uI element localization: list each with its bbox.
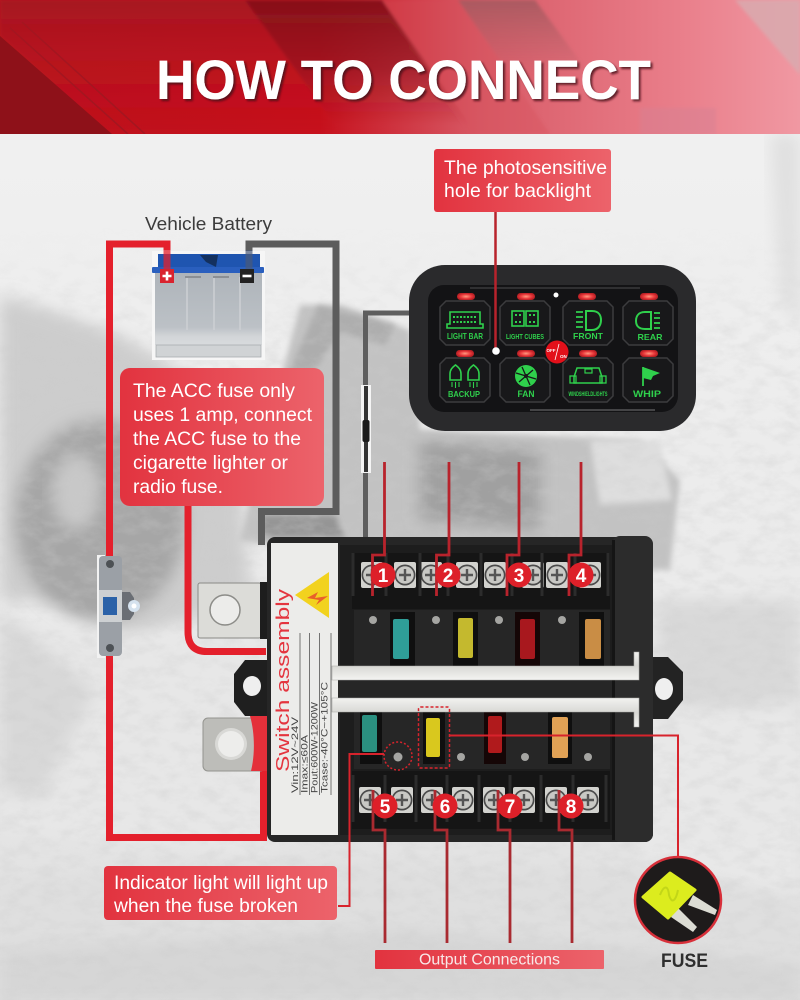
specification lines [290, 682, 330, 793]
button: windshield lights: WINDSHIELDLIGHTS [568, 392, 608, 398]
switch panel [409, 265, 696, 431]
fuse icon [635, 857, 721, 943]
button: front [563, 301, 613, 345]
ACC fuse wire [188, 500, 266, 652]
specification lines: Vin:12V~24V [290, 716, 301, 793]
negative terminal [240, 269, 254, 283]
badge 8 [558, 794, 584, 818]
button: whip [623, 358, 673, 402]
input wires top [372, 462, 581, 596]
badge 1 [370, 562, 396, 588]
callout: ACC fuse: the ACC fuse to the [133, 429, 301, 450]
badge 4: 4 [576, 566, 587, 587]
label heading: Switch assembly [273, 589, 293, 772]
upper fuse row [354, 610, 610, 666]
button: backup: BACKUP [448, 389, 480, 399]
button: light cubes [500, 301, 550, 345]
terminal lug upper [198, 582, 268, 639]
badge 5 [372, 794, 398, 818]
button: front: FRONT [573, 331, 604, 341]
callout: ACC fuse [120, 368, 324, 506]
specification lines: Imax:≤60A [300, 734, 310, 793]
button: fan [500, 358, 550, 402]
left mount ear [234, 660, 270, 716]
lower terminal strip [352, 771, 610, 829]
callout: photosensitive hole: The photosensitive [444, 157, 607, 179]
positive terminal [160, 269, 174, 283]
button: rear: REAR [638, 332, 662, 342]
button: light bar [440, 301, 490, 345]
callout: photosensitive hole [434, 149, 612, 212]
indicator light highlight and leader [338, 742, 412, 906]
badge 2: 2 [443, 566, 453, 587]
right mount ear [650, 657, 683, 719]
output wires bottom [373, 790, 572, 943]
warning triangle [295, 572, 329, 618]
badge 3: 3 [514, 566, 524, 587]
indicator LEDs [456, 293, 658, 357]
badge 5: 5 [380, 797, 391, 818]
upper silver bar [332, 652, 639, 680]
negative ground wire [249, 244, 336, 545]
badge 8: 8 [566, 797, 576, 818]
lower fuse row [354, 712, 610, 769]
upper terminal strip [352, 553, 610, 609]
button: backup [440, 358, 490, 402]
callout: ACC fuse: radio fuse. [133, 477, 223, 498]
white specification label [271, 543, 338, 835]
badge 7: 7 [505, 797, 515, 818]
button: light bar: LIGHT BAR [447, 331, 483, 341]
button: fan: FAN [518, 389, 534, 399]
badge 6: 6 [440, 797, 450, 818]
on/off button: ON [560, 354, 567, 359]
on/off button: OFF [546, 348, 556, 353]
number badges [370, 562, 594, 818]
specification lines: Tcase:-40°C~+105°C [320, 682, 330, 793]
callout: photosensitive hole: hole for backlight [444, 180, 592, 202]
callout: indicator light: Indicator light will light up [114, 873, 328, 894]
panel cable [361, 313, 412, 540]
callout: ACC fuse: uses 1 amp, connect [133, 405, 313, 426]
callout: indicator light: when the fuse broken [113, 896, 298, 917]
lower silver bar [332, 698, 639, 727]
badge 4 [568, 562, 594, 588]
title: HOW TO CONNECT [156, 48, 651, 111]
vehicle battery [152, 250, 265, 360]
output connections label [375, 950, 604, 969]
centre band [340, 680, 612, 698]
button: windshield lights [563, 358, 613, 402]
badge 2 [436, 562, 460, 588]
terminal lug lower [203, 716, 267, 771]
badge 6 [432, 794, 458, 818]
switch assembly block [267, 536, 653, 842]
badge 7 [498, 794, 522, 818]
button: light cubes: LIGHT CUBES [506, 332, 544, 341]
header banner [0, 0, 800, 134]
battery label: Vehicle Battery [145, 213, 273, 234]
fuse label: FUSE [661, 951, 708, 972]
inline fuse holder [97, 555, 140, 658]
specification lines: Pout:600W-1200W [310, 702, 320, 793]
positive battery wire [110, 244, 264, 838]
button: rear [623, 301, 673, 345]
on/off button [546, 340, 568, 364]
fuse highlight and leader [418, 707, 678, 858]
callout: ACC fuse: The ACC fuse only [133, 381, 295, 402]
badge 1: 1 [378, 566, 389, 587]
button: whip: WHIP [633, 389, 662, 400]
callout: indicator light [104, 866, 337, 920]
callout leader: photosensitive hole [492, 212, 500, 355]
badge 3 [506, 562, 532, 588]
callout: ACC fuse: cigarette lighter or [133, 453, 289, 474]
ambient light sensor dot [554, 292, 558, 298]
output connections label: Output Connections [419, 952, 560, 968]
